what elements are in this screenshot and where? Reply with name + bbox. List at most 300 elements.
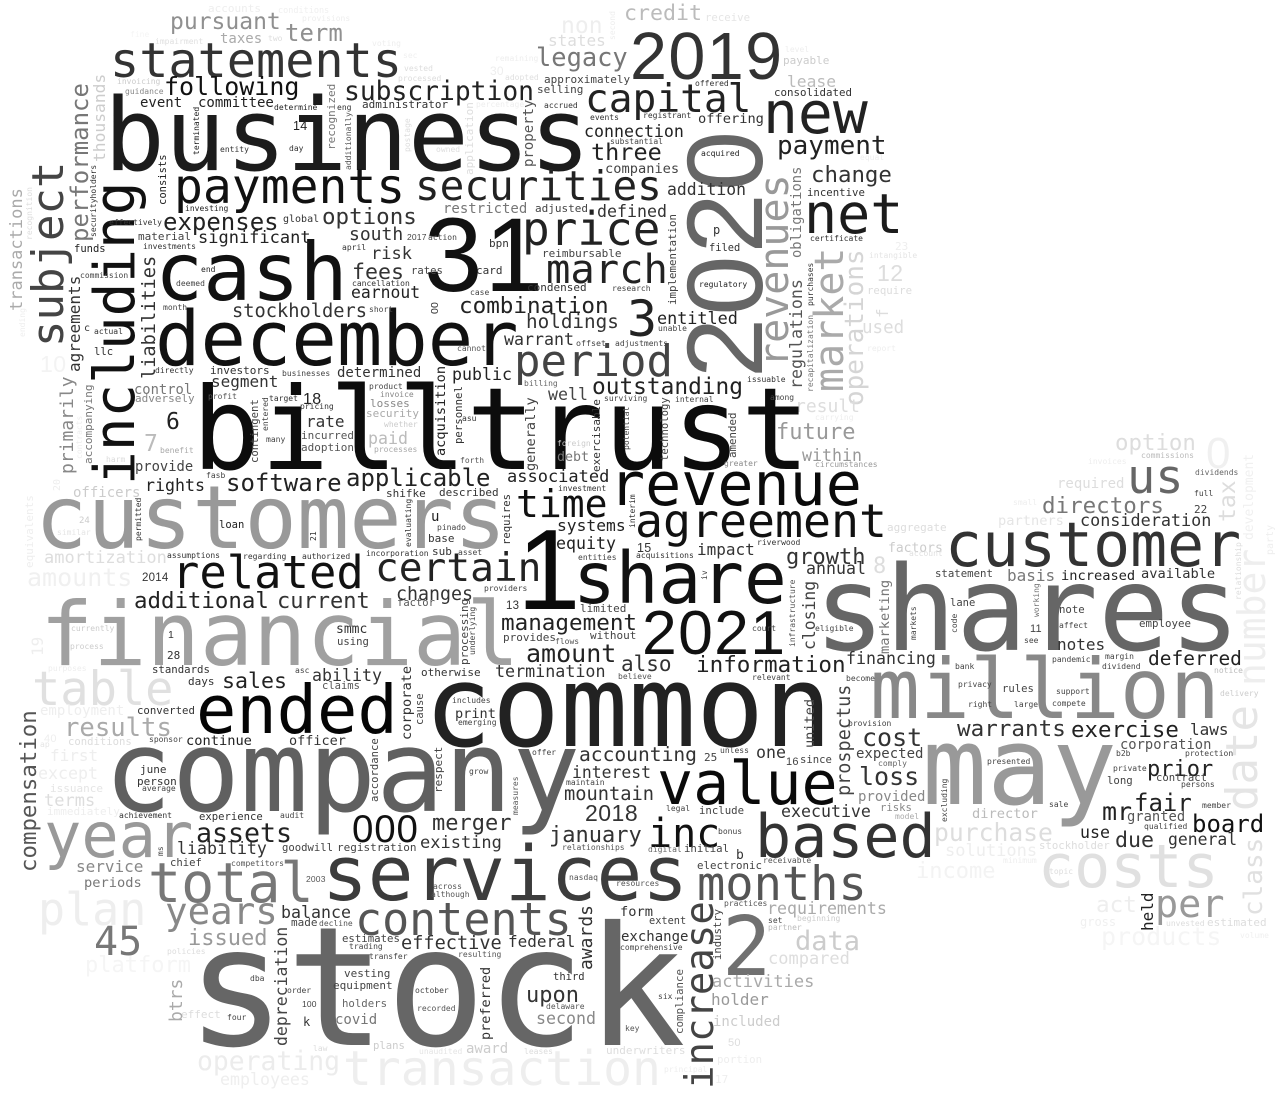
small words: product (369, 382, 403, 391)
medium words: credit (624, 1, 702, 26)
pale background words: application (463, 102, 476, 175)
pale background words: issuance (50, 782, 103, 795)
small words: cause (414, 693, 426, 725)
medium words: balance (281, 903, 351, 922)
medium words: companies (605, 161, 679, 177)
medium words: assets (196, 818, 292, 849)
word: share: share (573, 537, 787, 620)
small words: guidance (125, 87, 164, 96)
medium words: paid (368, 429, 408, 448)
medium words: increased (1061, 568, 1135, 584)
pale background words: minimum (1003, 856, 1037, 865)
small words: pinado (437, 523, 466, 532)
small words: registration (337, 841, 416, 854)
pale background words: party (1265, 525, 1276, 555)
word: including: including (83, 182, 148, 485)
medium words: risk (371, 244, 412, 264)
small words: filed (709, 242, 740, 254)
pale background words: award (466, 1041, 508, 1057)
small words: investment (558, 484, 606, 493)
pale background words: table (32, 662, 173, 717)
small words: selling (537, 83, 583, 96)
pale background words: terms (44, 791, 95, 811)
medium words: mr (1102, 797, 1132, 826)
word: contents: contents (355, 893, 572, 946)
small words: technology (659, 397, 671, 461)
medium words: current (277, 589, 370, 614)
small words: margin (1105, 652, 1134, 661)
medium words: use (1080, 823, 1110, 842)
small words: relevant (752, 673, 791, 682)
small words: b2b (1116, 749, 1131, 758)
pale background words: two (268, 34, 283, 43)
medium words: addition (667, 180, 746, 199)
small words: cannot (457, 344, 486, 353)
pale background words: sec (403, 51, 418, 60)
medium words: loss (859, 762, 919, 791)
pale background words: except (38, 764, 98, 783)
small words: 14 (293, 119, 307, 133)
medium words: expected (856, 746, 923, 762)
word: inc: inc (648, 811, 720, 857)
small words: right (968, 700, 992, 709)
pale background words: law (313, 1044, 328, 1053)
medium words: fair (1134, 789, 1192, 817)
small words: using (337, 636, 369, 648)
small words: private (1113, 764, 1147, 773)
medium words: depreciation (272, 927, 291, 1046)
medium words: granted (1127, 809, 1185, 825)
pale background words: intangible (869, 251, 917, 260)
pale background words: option (1115, 430, 1196, 456)
word: revenues: revenues (752, 174, 798, 367)
small words: billing (524, 379, 558, 388)
pale background words: plans (373, 1040, 405, 1052)
small words: forth (460, 456, 484, 465)
small words: flows (555, 637, 579, 646)
medium words: deferred (1148, 647, 1242, 670)
medium words: liability (177, 839, 267, 858)
medium words: federal (508, 932, 575, 951)
medium words: upon (526, 983, 579, 1008)
small words: underlying (468, 607, 477, 655)
small words: registrant (643, 111, 691, 120)
small words: digital (648, 845, 682, 854)
small words: practices (724, 899, 768, 908)
small words: permitted (134, 497, 143, 541)
small words: lane (950, 597, 975, 609)
small words: fasb (206, 471, 225, 480)
medium words: south (349, 224, 403, 245)
medium words: acquisition (433, 366, 449, 456)
medium words: segment (211, 372, 278, 391)
pale background words: operations (840, 249, 870, 406)
medium words: control (134, 382, 192, 398)
small words: days (188, 675, 214, 688)
pale background words: beginning (797, 914, 841, 923)
medium words: btrs (166, 979, 187, 1022)
pale background words: data (795, 926, 860, 957)
small words: respect (432, 747, 445, 793)
pale background words: leases (524, 1047, 553, 1056)
small words: grow (469, 767, 488, 776)
small words: full (1194, 489, 1213, 498)
small words: october (415, 986, 449, 995)
medium words: rights (145, 476, 205, 495)
medium words: merger (432, 811, 511, 836)
small words: person (137, 775, 177, 788)
small words: goodwill (282, 842, 333, 854)
small words: 28 (167, 649, 180, 662)
small words: maintain (566, 778, 605, 787)
medium words: performance (66, 83, 94, 242)
small words: riverwood (757, 538, 801, 547)
pale background words: invoicing (117, 77, 161, 86)
medium words: taxes (220, 31, 262, 47)
small words: foreign (557, 439, 591, 448)
word: 1: 1 (517, 507, 583, 634)
pale background words: unaudited (419, 1047, 463, 1056)
small words: benefit (160, 446, 194, 455)
pale background words: voting (372, 39, 401, 48)
medium words: interest (572, 763, 651, 782)
word: may: may (922, 705, 1117, 830)
small words: potential (622, 406, 631, 450)
pale background words: transaction (343, 1041, 661, 1096)
medium words: agreements (65, 276, 84, 372)
small words: investments (143, 242, 196, 251)
small words: converted (137, 704, 195, 717)
small words: without (590, 629, 636, 642)
medium words: three (591, 138, 662, 166)
medium words: pursuant (170, 9, 281, 35)
medium words: rate (306, 412, 345, 431)
pale background words: act (1096, 892, 1137, 918)
pale background words: estimated (1207, 916, 1267, 929)
pale background words: employees (220, 1070, 310, 1089)
pale background words: relationship (1234, 542, 1243, 600)
pale background words: owned (436, 145, 460, 154)
medium words: term (285, 19, 343, 47)
pale background words: topic (1049, 867, 1073, 876)
small words: interim (628, 494, 637, 528)
small words: pricing (300, 402, 334, 411)
medium words: u (431, 509, 439, 525)
pale background words: fine (130, 30, 149, 39)
small words: sponsor (149, 735, 183, 744)
medium words: available (1141, 566, 1215, 582)
medium words: public (452, 365, 512, 384)
small words: contingent (249, 399, 261, 463)
small words: accompanying (82, 385, 95, 464)
pale background words: receive (705, 11, 750, 24)
medium words: management (501, 610, 637, 636)
medium words: accounting (579, 743, 697, 766)
small words: presented (987, 757, 1031, 766)
word: per: per (1155, 882, 1225, 927)
small words: consolidated (774, 86, 852, 99)
word: billtrust: billtrust (192, 363, 810, 496)
word: 2021: 2021 (642, 598, 786, 668)
medium words: effective (401, 933, 502, 954)
small words: securityholders (89, 165, 98, 237)
small words: additionally (344, 112, 353, 170)
pale background words: aggregate (887, 521, 947, 534)
small words: set (768, 916, 783, 925)
small words: code (950, 614, 959, 633)
small words: otherwise (421, 666, 481, 679)
small words: across (433, 882, 462, 891)
pale background words: date (1217, 705, 1268, 811)
small words: contract (1156, 772, 1207, 784)
small words: evaluating (404, 499, 413, 547)
medium words: mountain (564, 784, 654, 805)
pale background words: f (873, 308, 892, 318)
medium words: applicable (346, 464, 490, 492)
small words: amended (726, 412, 739, 458)
small words: events (590, 113, 619, 122)
pale background words: process (70, 642, 104, 651)
small words: rates (411, 265, 443, 277)
small words: incentive (807, 186, 865, 199)
small words: invoice (380, 390, 414, 399)
medium words: additional (134, 588, 269, 614)
medium words: subscription (344, 77, 534, 107)
small words: issuable (747, 375, 786, 384)
word: services: services (322, 829, 688, 918)
medium words: within (802, 446, 862, 465)
small words: processing (458, 599, 471, 665)
pale background words: immediately (47, 805, 120, 818)
medium words: general (1168, 830, 1237, 849)
medium words: second (536, 1009, 596, 1028)
small words: vesting (344, 967, 390, 980)
small words: substantial (610, 137, 663, 146)
small words: among (770, 393, 794, 402)
pale background words: contracts (75, 415, 84, 459)
medium words: software (226, 469, 342, 497)
pale background words: similar (57, 528, 91, 537)
medium words: entitled (657, 308, 738, 328)
small words: acquired (701, 149, 740, 158)
medium words: provided (858, 789, 925, 805)
medium words: well (548, 385, 588, 404)
medium words: growth (786, 545, 865, 570)
pale background words: ap (40, 740, 50, 749)
small words: eligible (815, 624, 854, 633)
small words: offset (576, 338, 606, 348)
pale background words: 19 (28, 637, 47, 656)
small words: 2003 (306, 874, 326, 884)
pale background words: products (1101, 922, 1221, 951)
small words: shifke (386, 487, 426, 500)
small words: end (201, 265, 216, 274)
word: shares: shares (814, 540, 1240, 678)
pale background words: notice (1214, 666, 1243, 675)
small words: extent (649, 915, 686, 927)
medium words: notes (1057, 635, 1105, 654)
medium words: also (621, 652, 672, 676)
medium words: fees (352, 260, 404, 285)
small words: month (163, 303, 187, 312)
small words (80, 73, 1239, 1034)
medium words: outstanding (592, 374, 743, 400)
pale background words: carrying (815, 413, 854, 422)
medium words: periods (84, 875, 142, 891)
small words: entities (578, 553, 617, 562)
pale background words: 8 (873, 554, 886, 579)
small words: comprehensive (620, 943, 683, 952)
medium words: restricted (443, 201, 527, 217)
medium words: combination (459, 293, 609, 319)
medium words: marketing (877, 580, 893, 654)
pale background words: stockholder (1039, 839, 1110, 852)
small words: comply (878, 759, 907, 768)
medium words: future (776, 420, 855, 445)
medium words: united (802, 699, 818, 748)
small words: decline (319, 919, 353, 928)
small words: persons (1181, 780, 1215, 789)
medium words: funds (74, 243, 106, 255)
pale background words: harm (106, 455, 125, 464)
pale background words: gross (1080, 915, 1116, 929)
small words: 25 (704, 751, 717, 764)
pale background words: development (1242, 454, 1257, 540)
small words: nasdaq (569, 873, 598, 882)
small words: rules (1002, 683, 1034, 695)
small words: long (1107, 774, 1133, 787)
small words: transfer (369, 952, 408, 961)
small words: adoption (301, 441, 354, 454)
small words: since (800, 754, 832, 766)
word: 000: 000 (352, 808, 419, 851)
pale background words: processed (398, 74, 442, 83)
word: december: december (155, 295, 519, 383)
medium words: systems (557, 516, 626, 535)
pale background words: partner (768, 923, 802, 932)
word: march: march (546, 245, 668, 293)
small words: adjusted (535, 202, 588, 215)
medium words: committee (198, 95, 274, 111)
small words: support (1056, 687, 1090, 696)
pale background words: 24 (79, 516, 90, 526)
word: business: business (104, 76, 590, 194)
medium words: lease (787, 72, 836, 91)
small words: investing (185, 204, 229, 213)
pale background words: 30 (490, 64, 504, 78)
pale background words: provisions (302, 14, 350, 23)
medium words: print (455, 706, 496, 722)
pale background words: solutions (945, 841, 1037, 861)
pale background words: effect (181, 1008, 221, 1021)
small words: provides (503, 631, 556, 644)
medium words: event (140, 95, 182, 111)
small words: made (291, 916, 318, 929)
small words: circumstances (815, 460, 878, 469)
pale background words: equivalents (23, 495, 36, 568)
medium words: payment (777, 131, 887, 161)
medium words: regulations (787, 279, 806, 389)
small words: action (428, 233, 457, 242)
medium words: covid (335, 1012, 377, 1028)
medium words: director (972, 806, 1038, 822)
pale background words: 12 (877, 260, 904, 286)
small words: reimbursable (542, 247, 621, 260)
pale background words: level (785, 45, 809, 54)
small words: large (1014, 700, 1038, 709)
pale background words: policies (167, 947, 206, 956)
small words: internal (675, 395, 714, 404)
small words: base (428, 532, 454, 545)
small words: regulatory (699, 280, 747, 289)
small words: sub (432, 545, 452, 558)
medium words: amount (526, 639, 616, 668)
medium words: january (549, 823, 642, 848)
small words: incurred (301, 429, 354, 442)
medium words: holdings (526, 310, 619, 333)
small words: security (366, 407, 419, 420)
medium words: annual (806, 559, 866, 578)
medium words: legacy (536, 42, 628, 72)
small words: accrued (544, 101, 578, 110)
pale background words: impairment (155, 37, 203, 46)
small words: sale (1049, 800, 1068, 809)
medium words: associated (507, 467, 609, 487)
small words: markets (909, 606, 918, 640)
pale background words: plan (38, 883, 146, 936)
small words: risks (880, 802, 912, 814)
medium words: issued (188, 926, 267, 951)
word: price: price (522, 202, 660, 256)
small words: entity (220, 145, 249, 154)
small words: accordance (369, 738, 381, 802)
pale background words: income (916, 859, 995, 884)
pale background words: ending (18, 308, 27, 337)
small words: achievement (119, 811, 172, 820)
pale background words: conditions (278, 6, 329, 16)
pale background words: tax (1215, 480, 1241, 522)
small words: terminated (192, 107, 201, 155)
small words: bonus (718, 827, 742, 836)
medium words: primarily (57, 376, 78, 474)
small words: april (342, 243, 366, 252)
medium words: stockholders (232, 301, 367, 322)
medium words: compensation (16, 710, 42, 872)
medium words: activities (712, 972, 814, 992)
medium words: holder (711, 990, 769, 1009)
small words: estimates (342, 932, 400, 945)
pale background words: 0 (1206, 429, 1231, 478)
small words: iv (700, 570, 709, 580)
medium words: existing (420, 833, 502, 853)
medium words: material (138, 230, 191, 243)
medium words: consists (157, 154, 169, 205)
small words: exercisable (590, 399, 603, 472)
medium words: recognized (325, 84, 338, 150)
medium words: board (1192, 810, 1264, 838)
medium words: warrants (957, 716, 1066, 742)
small words: 13 (506, 600, 519, 612)
pale background words: non (561, 13, 603, 39)
small words: 21 (309, 531, 318, 541)
pale background words: currently (71, 624, 115, 633)
pale background words: partners (998, 513, 1064, 529)
small words: 11 (1030, 623, 1042, 635)
word: value: value (657, 749, 838, 819)
medium words: corporate (399, 666, 415, 740)
small words: cancellation (352, 279, 410, 288)
word: 31: 31 (424, 197, 545, 314)
